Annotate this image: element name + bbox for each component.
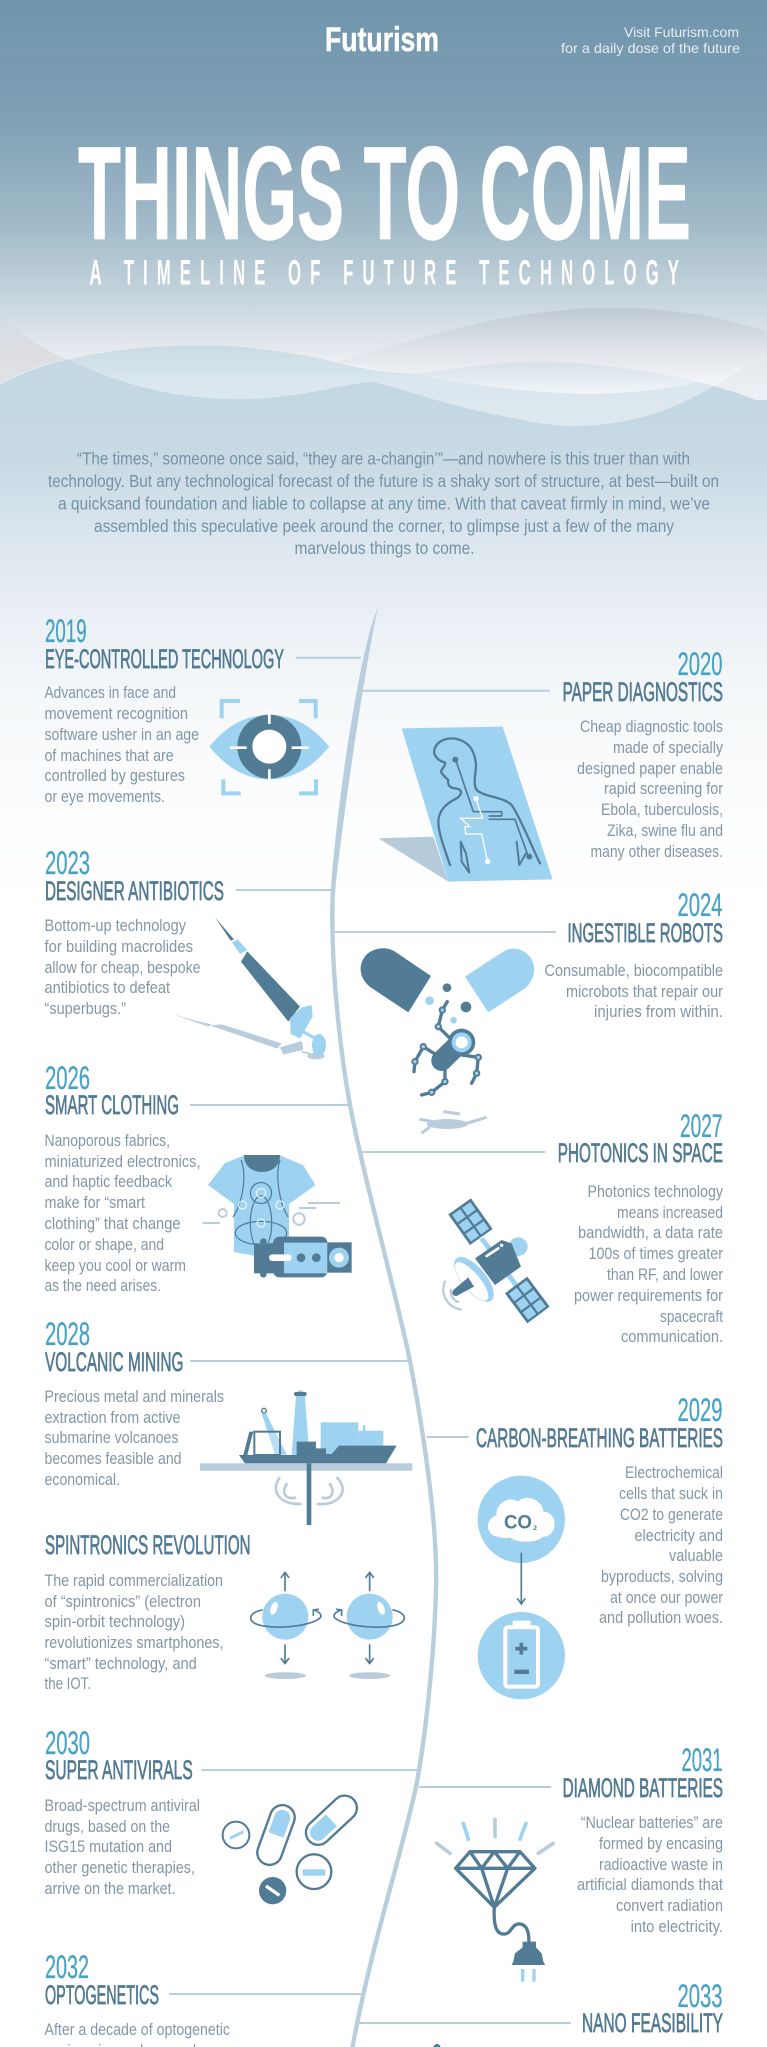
icon: syringe with shadow <box>172 917 326 1059</box>
body text: byproducts, solving <box>601 1567 723 1586</box>
body text: made of specially <box>613 738 723 757</box>
connector <box>190 1360 410 1362</box>
year: 2020 <box>678 646 722 682</box>
body text: make for “smart <box>44 1193 145 1212</box>
item: 2033 nano feasibility <box>359 1978 723 2047</box>
body text: Photonics technology <box>588 1182 723 1201</box>
body text: Consumable, biocompatible <box>544 961 723 980</box>
icon: CO2 cloud to battery: 2 <box>533 1525 537 1532</box>
intro paragraph: marvelous things to come. <box>294 538 474 558</box>
body text: submarine volcanoes <box>44 1428 178 1447</box>
icon: diamond with plug <box>437 1819 553 1982</box>
heading: VOLCANIC MINING <box>45 1347 184 1377</box>
item: 2027 photonics in space <box>362 1108 723 1346</box>
connector <box>169 1993 361 1995</box>
body text <box>44 916 200 1018</box>
header link text <box>561 24 740 56</box>
item: 2032 optogenetics <box>44 1949 361 2047</box>
body text: 100s of times greater <box>588 1244 723 1263</box>
connector <box>190 1104 349 1106</box>
body text: of “spintronics” (electron <box>44 1592 201 1611</box>
body text: extraction from active <box>44 1408 180 1427</box>
heading: SUPER ANTIVIRALS <box>45 1755 193 1785</box>
intro paragraph: assembled this speculative peek around the corner, to glimpse just a few of the many <box>94 516 674 536</box>
body text: valuable <box>669 1546 723 1565</box>
body text: Precious metal and minerals <box>44 1387 224 1406</box>
item: 2030 super antivirals <box>44 1725 419 1904</box>
body text: cells that suck in <box>619 1484 723 1503</box>
body text <box>574 1182 723 1346</box>
item: 2020 paper diagnostics <box>358 646 723 882</box>
body text: for building macrolides <box>44 937 193 956</box>
body text: designed paper enable <box>577 759 723 778</box>
year: 2032 <box>45 1949 89 1985</box>
body text: “smart” technology, and <box>44 1654 197 1673</box>
icon: smart shirt and projector <box>203 1155 352 1278</box>
body text: electricity and <box>634 1526 723 1545</box>
body text: bandwidth, a data rate <box>578 1223 723 1242</box>
body text <box>577 1813 723 1936</box>
intro paragraph: a quicksand foundation and liable to collapse at any time. With that caveat firmly in mind, we’ve <box>58 493 710 513</box>
icon: spinning electrons <box>251 1572 404 1679</box>
body text <box>44 1571 224 1693</box>
year: 2019 <box>45 613 87 649</box>
body text: microbots that repair our <box>566 982 723 1001</box>
body text: revolutionizes smartphones, <box>44 1633 224 1652</box>
connector <box>427 1436 469 1438</box>
item: 2024 ingestible robots <box>335 887 723 1133</box>
heading: EYE-CONTROLLED TECHNOLOGY <box>45 644 284 674</box>
body text: becomes feasible and <box>44 1449 182 1468</box>
icon: eye with focus brackets <box>209 701 329 793</box>
body text: color or shape, and <box>44 1235 164 1254</box>
body text: than RF, and lower <box>607 1265 723 1284</box>
body text: into electricity. <box>631 1917 723 1936</box>
body text: other genetic therapies, <box>44 1858 195 1877</box>
connector <box>335 931 556 933</box>
body text <box>599 1463 723 1627</box>
body text: or eye movements. <box>44 787 165 806</box>
lower page background <box>0 400 767 920</box>
connector <box>202 1769 419 1771</box>
body text: formed by encasing <box>599 1834 723 1853</box>
intro paragraph: “The times,” someone once said, “they are a-changin’”—and nowhere is this truer than with <box>77 449 690 469</box>
body text: and pollution woes. <box>599 1608 723 1627</box>
body text: Broad-spectrum antiviral <box>44 1796 200 1815</box>
body text: allow for cheap, bespoke <box>44 958 200 977</box>
body text: radioactive waste in <box>599 1855 723 1874</box>
body text: keep you cool or warm <box>44 1256 186 1275</box>
item: 2019 eye-controlled technology <box>44 613 361 806</box>
body text: antibiotics to defeat <box>44 978 170 997</box>
timeline spine <box>331 608 436 2047</box>
body text: spacecraft <box>660 1307 723 1326</box>
item: spintronics revolution <box>44 1530 404 1693</box>
body text: Ebola, tuberculosis, <box>601 800 723 819</box>
icon: paper test with human outline <box>378 727 553 882</box>
icon: CO2 cloud to battery <box>478 1476 565 1699</box>
body text: The rapid commercialization <box>44 1571 223 1590</box>
body text: injuries from within. <box>594 1002 723 1021</box>
body text <box>44 2020 230 2047</box>
body text <box>44 1387 224 1489</box>
body text: convert radiation <box>616 1896 723 1915</box>
body text <box>577 717 723 861</box>
item: 2023 designer antibiotics <box>44 845 332 1059</box>
body text: arrive on the market. <box>44 1879 176 1898</box>
body text <box>544 961 723 1021</box>
year: 2028 <box>45 1316 90 1352</box>
body text: and haptic feedback <box>44 1172 172 1191</box>
year: 2024 <box>678 887 722 923</box>
body text: Zika, swine flu and <box>607 821 723 840</box>
body text: spin-orbit technology) <box>44 1612 185 1631</box>
item: 2028 volcanic mining <box>44 1316 412 1525</box>
year: 2033 <box>678 1978 722 2014</box>
body text: power requirements for <box>574 1286 723 1305</box>
heading: SMART CLOTHING <box>45 1090 179 1120</box>
body text: ISG15 mutation and <box>44 1837 172 1856</box>
body text: “Nuclear batteries” are <box>581 1813 723 1832</box>
item: 2026 smart clothing <box>44 1060 352 1295</box>
connector <box>358 690 550 692</box>
body text: clothing” that change <box>44 1214 180 1233</box>
subtitle: A TIMELINE OF FUTURE TECHNOLOGY <box>90 253 679 292</box>
body text: many other diseases. <box>590 842 723 861</box>
body text: Nanoporous fabrics, <box>44 1131 170 1150</box>
body text: movement recognition <box>44 704 188 723</box>
header link text: for a daily dose of the future <box>561 40 740 56</box>
body text: Electrochemical <box>625 1463 723 1482</box>
year: 2026 <box>45 1060 90 1096</box>
heading: SPINTRONICS REVOLUTION <box>45 1530 250 1560</box>
icon: satellite <box>443 1198 550 1323</box>
body text: Cheap diagnostic tools <box>580 717 723 736</box>
body text: CO2 to generate <box>620 1505 723 1524</box>
header link text: Visit Futurism.com <box>624 24 739 40</box>
body text: communication. <box>621 1327 723 1346</box>
decorative waves <box>0 300 767 426</box>
icon: capsule releasing a microbot <box>361 948 534 1133</box>
body text: artificial diamonds that <box>577 1875 723 1894</box>
icon: CO2 cloud to battery: CO <box>504 1512 532 1533</box>
icon: pills <box>223 1791 362 1904</box>
connector <box>236 889 332 891</box>
body text: rapid screening for <box>604 779 723 798</box>
item: 2029 carbon-breathing batteries <box>427 1392 723 1699</box>
body text: drugs, based on the <box>44 1817 170 1836</box>
body text: “superbugs.” <box>44 999 126 1018</box>
body text: After a decade of optogenetic <box>44 2020 230 2039</box>
item: 2031 diamond batteries <box>419 1742 723 1982</box>
year: 2027 <box>680 1108 722 1144</box>
body text: Bottom-up technology <box>44 916 186 935</box>
body text <box>44 683 199 806</box>
logo: Futurism: Futurism <box>325 21 439 59</box>
body text: software usher in an age <box>44 725 199 744</box>
year: 2029 <box>678 1392 722 1428</box>
connector <box>419 1786 551 1788</box>
heading: DESIGNER ANTIBIOTICS <box>45 876 224 906</box>
connector <box>359 2022 571 2024</box>
header background <box>0 0 767 410</box>
body text: economical. <box>44 1470 120 1489</box>
year: 2031 <box>682 1742 722 1778</box>
body text <box>44 1796 200 1898</box>
year: 2030 <box>45 1725 90 1761</box>
heading: OPTOGENETICS <box>45 1980 159 2010</box>
body text: controlled by gestures <box>44 766 185 785</box>
body text: means increased <box>617 1203 723 1222</box>
icon: mining ship and drill <box>200 1390 412 1525</box>
body text: at once our power <box>610 1588 723 1607</box>
connector <box>296 657 361 659</box>
connector <box>362 1151 546 1153</box>
body text: of machines that are <box>44 746 174 765</box>
year: 2023 <box>45 845 90 881</box>
icon: partial top of nano icon <box>434 2044 440 2047</box>
body text: miniaturized electronics, <box>44 1152 200 1171</box>
body text: as the need arises. <box>44 1276 161 1295</box>
body text: Advances in face and <box>44 683 176 702</box>
body text <box>44 1131 200 1295</box>
intro paragraph <box>48 449 719 558</box>
body text: the IOT. <box>44 1674 91 1693</box>
